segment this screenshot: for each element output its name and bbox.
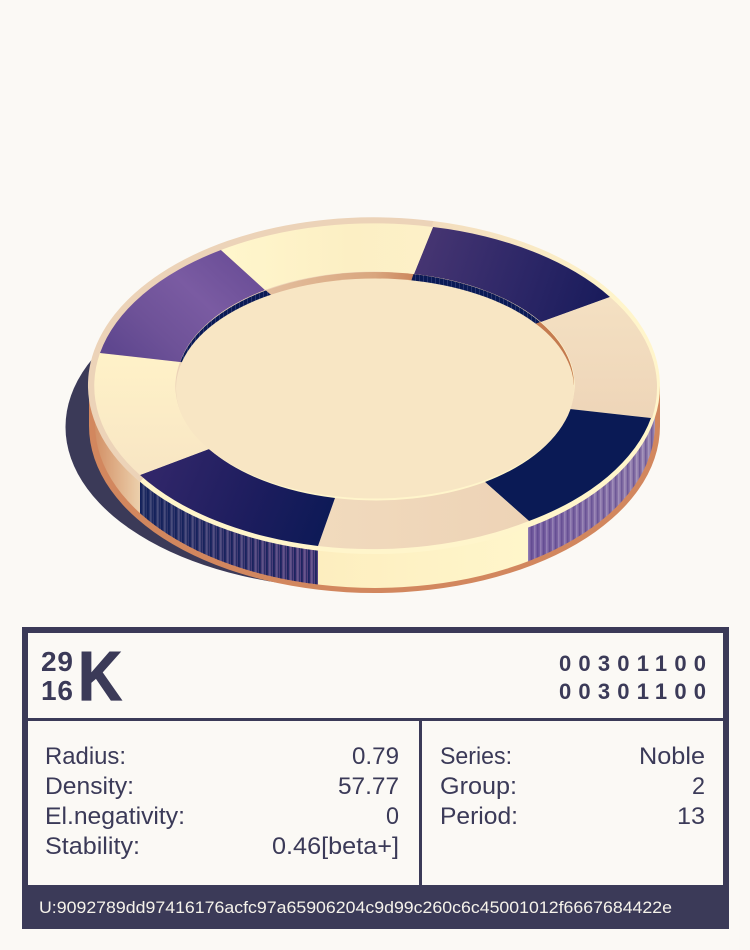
segment: cream left xyxy=(94,353,209,475)
top rim right arc xyxy=(430,221,620,310)
top rim peach arc xyxy=(88,217,433,482)
footer band xyxy=(22,885,729,929)
disc shadow xyxy=(66,266,636,588)
left properties: 57.77 xyxy=(338,773,399,800)
element mass and atomic numbers: 16 xyxy=(41,675,73,706)
orange base edge xyxy=(89,385,660,593)
hole inner wall xyxy=(180,272,574,385)
left properties: 0.46[beta+] xyxy=(272,833,399,860)
ring disc xyxy=(88,217,660,595)
segment: purple upper left xyxy=(100,250,265,362)
right properties: Series: xyxy=(440,743,512,770)
centre floor xyxy=(176,278,574,498)
outer wall xyxy=(95,417,655,588)
element mass and atomic numbers xyxy=(41,646,73,706)
header divider xyxy=(28,718,723,721)
left properties xyxy=(45,743,399,860)
right properties: Period: xyxy=(440,803,518,830)
segment: cream top xyxy=(221,223,433,290)
column divider xyxy=(419,720,422,886)
segment: peach right xyxy=(541,297,657,418)
left properties: 0 xyxy=(386,803,399,830)
right properties: 2 xyxy=(692,773,705,800)
left properties: Radius: xyxy=(45,743,126,770)
right properties: 13 xyxy=(677,803,705,830)
segment: navy lower right xyxy=(485,409,651,521)
element symbol: K xyxy=(78,637,122,715)
footer hash: U:9092789dd97416176acfc97a65906204c9d99c260c6c45001012f6667684422e xyxy=(39,898,672,917)
binary codes: 00301100 xyxy=(559,679,706,704)
left properties: Stability: xyxy=(45,833,140,860)
top rim xyxy=(89,218,660,554)
left properties: El.negativity: xyxy=(45,803,185,830)
left properties: Density: xyxy=(45,773,134,800)
segment: peach bottom xyxy=(318,482,529,549)
binary codes: 00301100 xyxy=(559,651,706,676)
segment: dark indigo upper right xyxy=(414,227,610,322)
segment: dark indigo lower left xyxy=(140,449,335,546)
right properties: Group: xyxy=(440,773,517,800)
right properties: Noble xyxy=(639,743,705,770)
binary codes xyxy=(559,651,706,704)
panel frame xyxy=(25,630,726,926)
right properties xyxy=(440,743,705,830)
left properties: 0.79 xyxy=(352,743,399,770)
element mass and atomic numbers: 29 xyxy=(41,646,73,677)
info panel xyxy=(22,630,729,929)
